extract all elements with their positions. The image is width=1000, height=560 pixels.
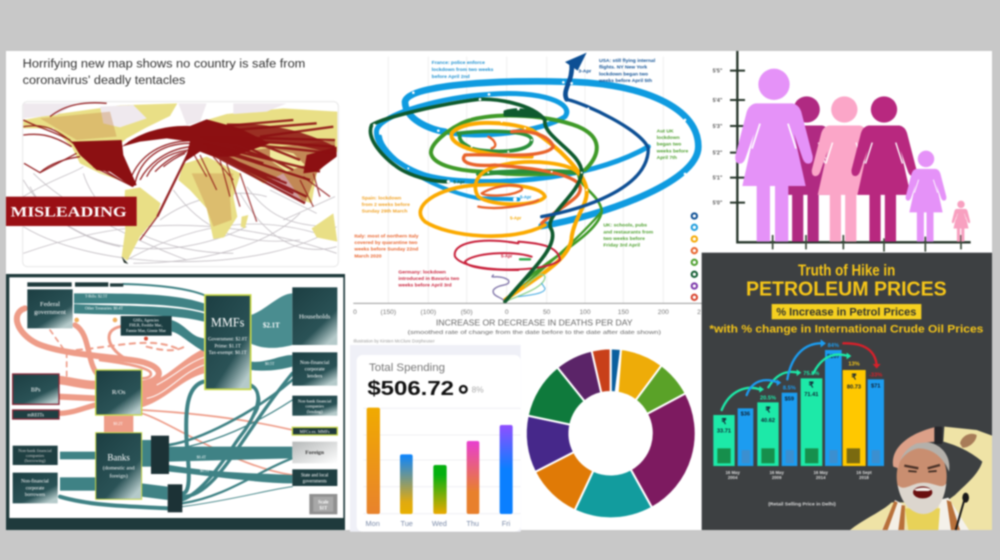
non-financial lenders box: lenders	[307, 373, 322, 379]
spiral annotations: two weeks before	[603, 236, 645, 242]
spiral annotations: 3-Apr	[578, 69, 591, 75]
non-bank borrowers box: Non-bank financial	[18, 448, 52, 453]
spiral x axis: 100	[579, 309, 591, 316]
non-financial lenders box: Non-financial	[300, 360, 329, 366]
bank securities box	[168, 484, 182, 512]
non-financial borrowers box	[13, 473, 58, 503]
MMFs box: Tax-exempt: $0.1T	[209, 351, 247, 356]
spiral x axis: INCREASE OR DECREASE IN DEATHS PER DAY	[436, 319, 633, 328]
bar chart: Fri	[502, 519, 511, 528]
non-bank borrowers box	[13, 446, 58, 465]
percent change labels: 8.5%	[783, 385, 796, 391]
percent change labels: 75.8%	[803, 371, 819, 377]
spiral x axis	[353, 303, 705, 336]
GSEs box	[121, 316, 172, 336]
height axis	[713, 51, 971, 252]
band value labels: $0.2T	[113, 421, 123, 426]
spiral x axis: 150	[618, 309, 629, 316]
non-bank lenders box: (lending)	[307, 409, 323, 414]
GSEs box: GSEs, Agencies	[133, 317, 159, 322]
percent change labels: 13%	[848, 362, 860, 368]
MMFs box: Prime: $1.1T	[215, 344, 241, 349]
spiral annotations: 5-Apr	[510, 215, 522, 220]
height axis: 5'1"	[713, 176, 723, 182]
spiral annotations: lockdown	[657, 135, 680, 141]
salmon flows	[17, 308, 292, 475]
salmon R/Os to MMFs band	[142, 348, 204, 407]
sankey frame	[6, 274, 345, 530]
petroleum bar chart: 33.71	[717, 429, 731, 435]
spiral x axis: 50	[543, 309, 551, 316]
R/Os box: R/Os	[112, 389, 126, 396]
bar chart: Mon	[366, 519, 380, 528]
sankey top labels	[27, 282, 123, 287]
people figures	[735, 69, 970, 242]
percent change labels: 20.5%	[760, 395, 776, 401]
petroleum bar chart: 71.41	[804, 392, 818, 398]
petroleum title: Truth of Hike in	[798, 262, 895, 279]
panel: financial flow sankey	[6, 274, 345, 530]
spiral annotations: lockdown from two weeks	[432, 67, 494, 73]
mREITs box: mREITs	[27, 413, 44, 418]
arrow heads	[759, 339, 881, 393]
spending card	[350, 345, 521, 532]
map headline: Horrifying new map shows no country is safe from	[23, 56, 305, 70]
state and local box: governments	[303, 479, 327, 484]
scale box: $1T	[319, 506, 328, 511]
spiral annotations: weeks before Sunday 22nd	[353, 247, 418, 253]
spiral annotations: weeks before April 5th	[598, 78, 652, 84]
date labels: 16 May	[725, 470, 740, 475]
date labels	[725, 470, 872, 480]
bar chart: Thu	[466, 519, 479, 528]
spiral annotations: weeks before	[656, 148, 688, 154]
foreign box	[292, 442, 337, 463]
spiral x axis: 0	[353, 309, 357, 316]
date labels: 16 May	[813, 470, 828, 475]
petroleum bar chart: ₹	[809, 380, 814, 389]
bar chart: Wed	[432, 519, 447, 528]
map headline: coronavirus' deadly tentacles	[23, 73, 185, 87]
spiral annotations: weeks before April 3rd	[397, 283, 452, 289]
height axis: 5'3"	[713, 124, 723, 130]
state and local box	[292, 469, 337, 486]
bar chart: Tue	[400, 519, 413, 528]
flow junction dots	[74, 318, 148, 341]
height axis: 5'0"	[713, 201, 723, 207]
spiral annotations: Spain: lockdown	[362, 195, 401, 201]
spiral annotations: 5-Apr	[501, 253, 513, 258]
spiral x axis: (100)	[421, 309, 436, 316]
spiral annotations: USA: still flying internal	[599, 58, 655, 64]
band value labels: $0.4T	[197, 455, 207, 460]
band value labels	[85, 293, 275, 473]
world map	[23, 102, 338, 267]
MMFs box	[205, 295, 251, 389]
petroleum note: *with % change in International Crude Oil Prices	[709, 323, 983, 335]
percent change labels	[760, 343, 882, 401]
panel: misleading coronavirus map	[6, 56, 338, 267]
date labels: 2014	[816, 475, 826, 480]
bar chart	[363, 408, 521, 528]
petroleum bar chart: 80.73	[847, 385, 861, 391]
date labels: 16 May	[769, 470, 784, 475]
banks box: (domestic and	[103, 465, 135, 471]
spiral annotations: Italy: most of northern Italy	[354, 233, 419, 239]
spiral x axis: 2	[697, 309, 701, 316]
non-bank lenders box: Non-bank financial	[298, 398, 331, 403]
misleading banner	[6, 197, 137, 226]
spiral annotations: March 2020	[354, 253, 382, 259]
spending heading: Total Spending	[369, 362, 445, 374]
band value labels: Other Treasuries: $0.4T	[85, 306, 124, 311]
MFCs box: MFCs ex. MMFs	[300, 429, 330, 434]
GSEs box: FHLB, Freddie Mac,	[129, 323, 163, 329]
banks box: Banks	[107, 453, 130, 463]
BPs box	[13, 374, 59, 404]
spiral annotations: April 7th	[657, 155, 677, 161]
federal government box: Federal	[40, 301, 60, 308]
spiral annotations: from 2 weeks before	[362, 202, 410, 208]
state and local box: State and local	[301, 473, 328, 478]
GSEs box: Fannie Mae, Ginnie Mae	[126, 328, 166, 334]
date labels: 2009	[772, 475, 782, 480]
MFCs box	[292, 427, 337, 435]
growth arrows	[722, 343, 877, 410]
non-financial borrowers box: Non-financial	[21, 480, 49, 485]
petroleum bar chart: ₹	[721, 417, 727, 426]
non-bank lenders box: companies	[305, 404, 324, 409]
band value labels: $0.5T	[200, 468, 210, 473]
bank instruments box	[151, 436, 169, 474]
banks box	[96, 433, 142, 499]
petroleum bar chart	[713, 350, 884, 466]
household flow value: $2.1T	[263, 321, 280, 329]
petroleum background	[702, 253, 992, 530]
map headline	[23, 56, 305, 87]
households box: Households	[299, 314, 331, 321]
households box	[292, 287, 337, 345]
spiral annotations: introduced in Bavaria two	[398, 276, 459, 282]
non-financial borrowers box: corporate	[26, 486, 45, 491]
spiral x axis: (smoothed rate of change from the date before to the date after date shown)	[408, 330, 661, 336]
R/Os box	[96, 370, 142, 415]
federal government box: government	[34, 309, 66, 316]
federal government box	[27, 289, 73, 328]
spiral annotations: Sunday 29th March	[362, 209, 407, 215]
teal flows	[60, 293, 292, 500]
panel: deaths-per-day spiral chart	[353, 53, 705, 343]
spiral legend dots	[692, 213, 697, 300]
scale box	[309, 494, 337, 514]
spiral grid lines	[388, 57, 663, 303]
band value labels: $0.5T	[265, 361, 275, 366]
spiral annotations: Germany: lockdown	[398, 269, 446, 275]
spiral annotations: lockdown began two	[599, 71, 648, 77]
spiral annotations: UK: schools, pubs	[603, 223, 647, 229]
foreign box: Foreign	[305, 450, 325, 456]
spiral credit: Illustration by Kirsten McClure Dorpheuser	[353, 338, 435, 343]
height axis: 5'2"	[713, 151, 723, 157]
percent change labels: -33%	[869, 372, 882, 378]
petroleum title: PETROLEUM PRICES	[746, 278, 947, 301]
spiral annotations: Friday 3rd April	[603, 243, 641, 249]
petroleum subtitle: % Increase in Petrol Prices	[776, 306, 916, 318]
non-financial lenders box: corporate	[305, 367, 325, 373]
spiral annotations	[353, 58, 688, 289]
spending total: 8%	[472, 384, 484, 394]
non-financial lenders box	[292, 352, 337, 386]
spiral trajectories	[370, 53, 698, 302]
band value labels: T-Bills: $2.5T	[85, 293, 108, 298]
date labels: 2004	[728, 475, 738, 480]
BPs box: BPs	[31, 387, 41, 393]
panel: petroleum prices	[702, 253, 992, 530]
MMFs box: Government: $2.8T	[208, 338, 247, 343]
non-bank lenders box	[292, 396, 337, 416]
spiral x axis: (150)	[381, 309, 396, 316]
height axis: 5'5"	[713, 69, 723, 75]
MMFs box: MMFs	[211, 316, 245, 330]
petroleum bar chart: $71	[871, 383, 880, 389]
banks box: foreign)	[110, 472, 128, 479]
petroleum bar chart: $107	[827, 354, 840, 360]
scale box: Scale	[318, 500, 329, 505]
misleading banner: MISLEADING	[11, 204, 127, 220]
donut chart	[526, 348, 696, 518]
petroleum title	[746, 262, 947, 301]
panel: total spending bar chart	[350, 345, 696, 532]
spiral annotations: 5-Apr	[520, 195, 532, 200]
date labels: 16 Sept	[856, 470, 872, 475]
spiral annotations: began two	[657, 142, 681, 148]
spiral x axis: 0	[505, 309, 509, 316]
spiral annotations: flights. NY New York	[599, 65, 647, 71]
spiral annotations: France: police enforce	[432, 60, 485, 66]
spiral white date markers	[373, 81, 686, 220]
panel: height pictogram	[713, 51, 971, 252]
spiral x axis: 200	[658, 309, 669, 316]
percent change labels: 84%	[828, 343, 839, 349]
spending total	[367, 378, 484, 400]
R/Os to banks connector	[104, 416, 133, 432]
date labels: 2018	[859, 475, 869, 480]
non-financial borrowers box: borrowers	[25, 493, 45, 498]
petroleum bar chart: ₹	[851, 372, 857, 381]
non-bank borrowers box: (borrowing)	[25, 458, 46, 463]
spiral annotations: 5-Apr	[453, 179, 465, 184]
spending total: $506.72	[367, 378, 454, 400]
mREITs box	[13, 410, 59, 419]
spiral annotations: covered by quarantine two	[354, 240, 417, 246]
man photo illustration	[850, 427, 992, 530]
petroleum bar chart: $36	[741, 411, 750, 417]
height axis: 5'4"	[713, 98, 723, 104]
spiral annotations: before April 2nd	[432, 74, 470, 80]
retail price note: (Retail Selling Price in Delhi)	[768, 502, 836, 508]
spiral annotations: and restaurants from	[603, 229, 654, 235]
petroleum bar chart: $59	[785, 397, 794, 403]
petroleum bar chart: ₹	[765, 406, 771, 415]
petroleum bar chart: 40.62	[761, 418, 775, 424]
spiral annotations: Aut UK	[657, 128, 674, 134]
non-bank borrowers box: companies	[26, 453, 45, 458]
spiral x axis: (50)	[461, 309, 473, 316]
